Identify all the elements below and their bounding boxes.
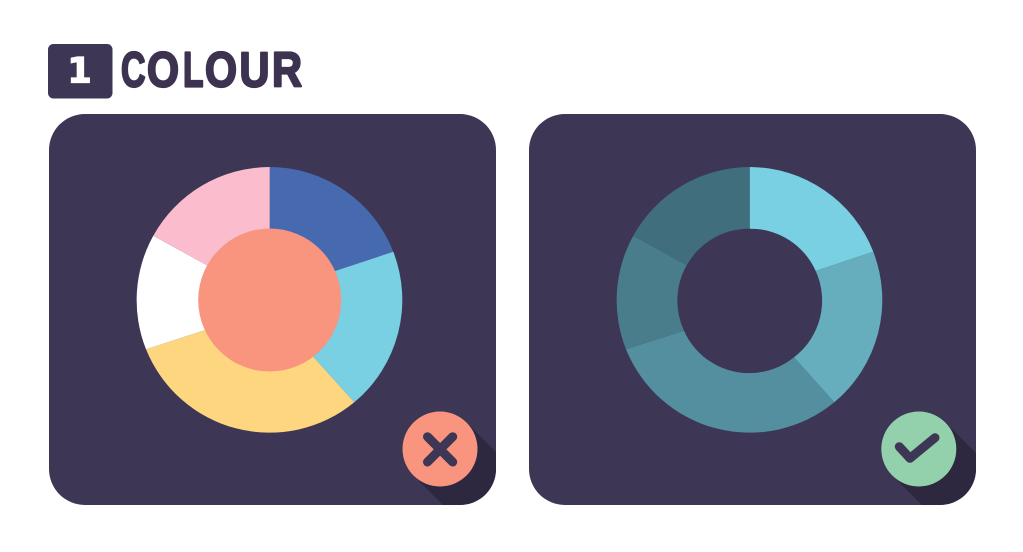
panel: good colour example — [529, 114, 976, 505]
number badge: 1 — [67, 52, 92, 92]
icon: check badge — [881, 412, 976, 505]
donut chart: mismatched colours — [137, 167, 402, 433]
donut chart: harmonious shades — [617, 167, 882, 433]
heading: section number and title — [48, 44, 302, 98]
infographic — [48, 44, 976, 505]
donut centre — [198, 228, 341, 372]
title: C — [121, 44, 146, 98]
panel: bad colour example — [49, 114, 496, 505]
title: O — [205, 44, 237, 98]
title: O — [147, 44, 179, 98]
title: L — [183, 44, 204, 98]
title — [121, 44, 302, 98]
title: R — [272, 44, 302, 98]
title: U — [240, 44, 270, 98]
number badge — [48, 44, 112, 98]
icon: cross badge — [402, 412, 496, 505]
